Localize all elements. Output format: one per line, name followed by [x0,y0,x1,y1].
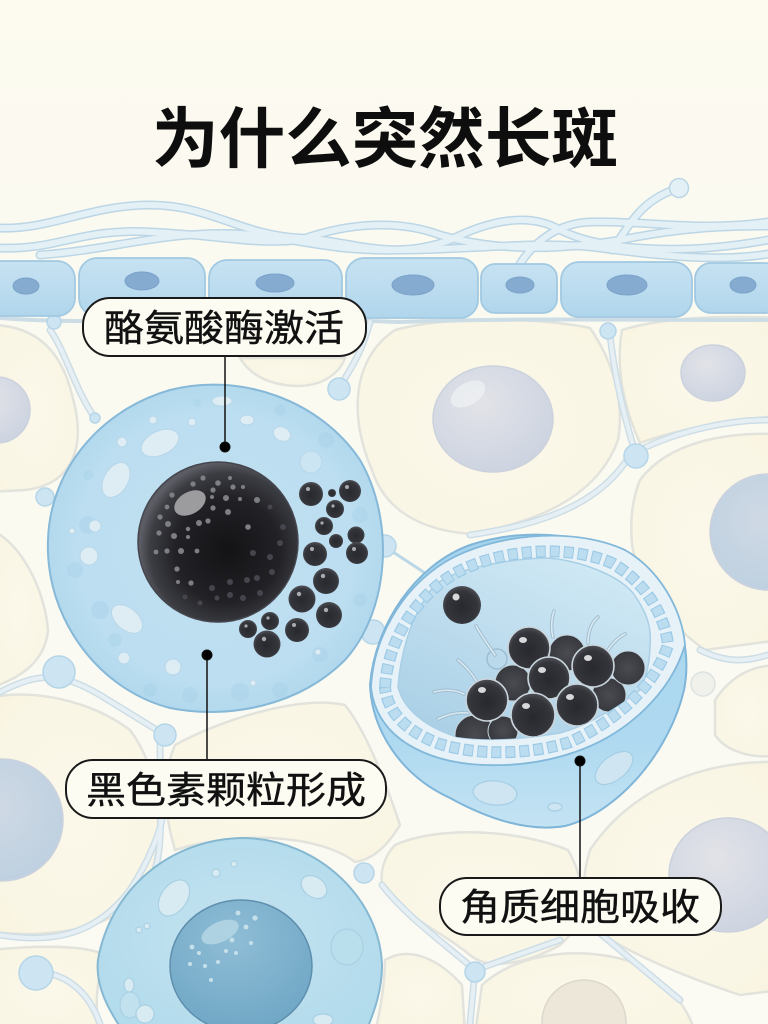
bottom cell nucleus [170,900,312,1024]
icon: melanin granules [239,480,368,658]
title: 为什么突然长斑 [152,102,618,176]
label: keratinocyte absorption: 角质细胞吸收 [460,887,700,928]
cell mottling [67,399,368,703]
basal cell nuclei [13,272,756,295]
keratinocyte cavity rim [371,536,685,765]
panel: cream skin cells [0,317,768,1024]
bottom cell vacuoles [120,861,363,1024]
nucleus specks [188,911,258,982]
small junction vesicles [19,315,715,990]
cell vacuoles [69,396,322,686]
panel: keratinocyte cell [370,535,686,828]
cilia strands [434,611,625,719]
panel: melanocyte cell [48,385,383,712]
connector: melanin granule label [202,650,212,760]
keratinocyte lower vacuoles [472,745,639,811]
label: tyrosinase activation: 酪氨酸酶激活 [104,308,344,349]
panel: top skin layer fibres [0,178,768,264]
icon: absorbed melanin granules [454,626,646,740]
icon: pale nuclei [0,345,768,1024]
connector: keratinocyte label [575,756,585,878]
keratinocyte rim beads [385,551,668,752]
label: keratinocyte absorption [440,878,721,935]
panel: bottom blue cell [98,838,382,1024]
panel: top basal cell row [0,258,768,318]
label: melanin granule formation: 黑色素颗粒形成 [86,770,366,811]
connecting network strokes [0,318,768,1024]
connector: tyrosinase label [220,356,230,452]
icon: dark melanin nucleus [138,462,298,622]
label: melanin granule formation [66,760,386,818]
keratinocyte cavity [398,558,650,739]
icon: free melanin granule [443,586,481,624]
label: tyrosinase activation [83,298,366,356]
